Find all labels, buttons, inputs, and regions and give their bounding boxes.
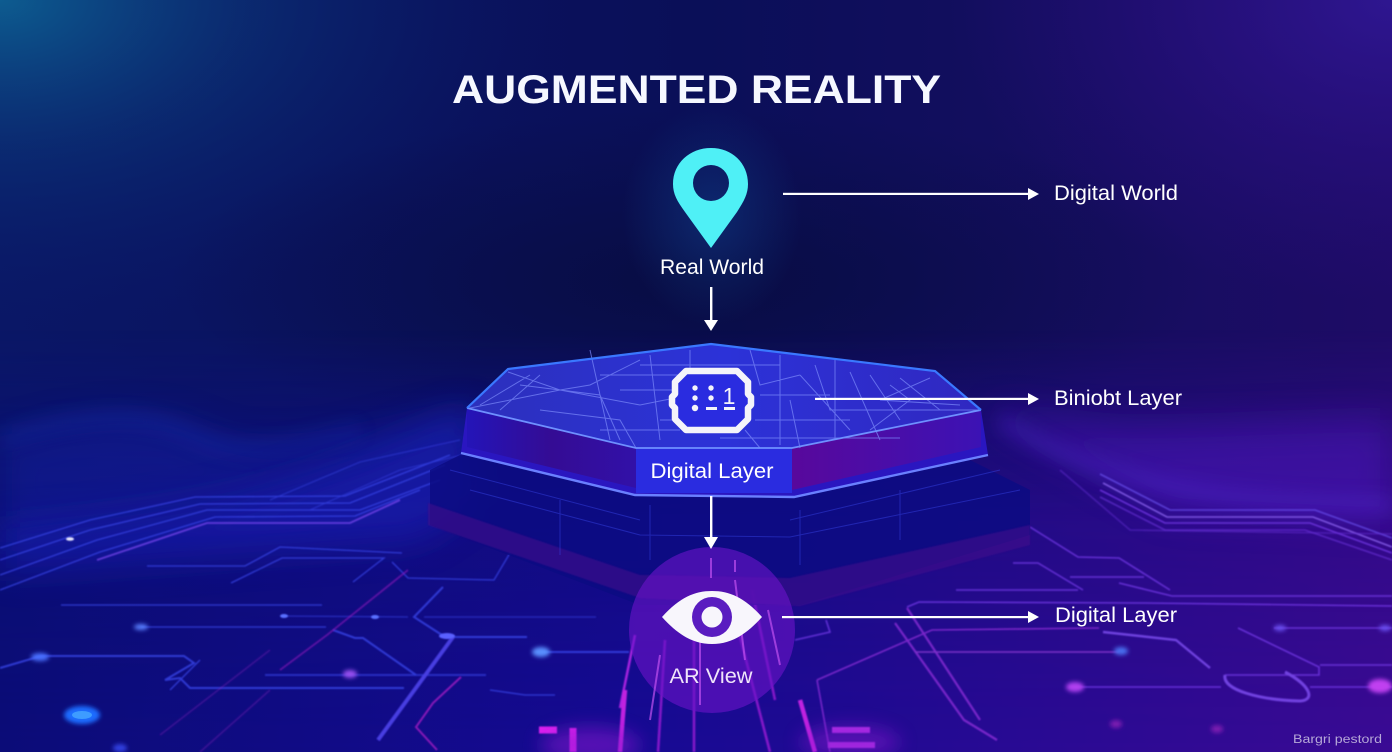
label: Biniobt Layer: Biniobt Layer <box>1054 386 1182 410</box>
label: AR View: AR View <box>670 664 753 688</box>
label: Digital World: Digital World <box>1054 181 1178 205</box>
AR View circle <box>629 547 795 713</box>
watermark: Bargri pestord <box>1293 734 1382 746</box>
platform: lower stacked tiers <box>428 450 1030 606</box>
front face of the platform <box>636 448 792 493</box>
vertical magenta streaks through the circle <box>650 558 780 720</box>
arrow: platform to AR View <box>704 496 718 549</box>
arrow: to Digital Layer <box>782 611 1039 623</box>
circuit traces: right <box>795 470 1392 752</box>
icon: eye <box>662 591 762 644</box>
circuit traces: left <box>0 440 629 740</box>
platform: Digital Layer hexagon <box>461 344 988 497</box>
arrow: to Digital World <box>783 188 1039 200</box>
label: Real World: Real World <box>660 255 764 279</box>
title: AUGMENTED REALITY <box>452 68 941 112</box>
circuit traces: magenta <box>160 570 875 752</box>
arrow: to Biniobt Layer <box>815 393 1039 405</box>
label: Digital Layer on platform: Digital Layer <box>650 459 774 483</box>
icon: location pin <box>673 148 748 248</box>
wave glow bands left and right <box>0 405 1392 570</box>
glowing circuit nodes <box>31 537 1392 752</box>
icon: chip <box>672 371 751 430</box>
icon: chip: 1 <box>723 383 735 409</box>
label: Digital Layer right: Digital Layer <box>1055 603 1177 627</box>
arrow: Real World to platform <box>704 287 718 331</box>
